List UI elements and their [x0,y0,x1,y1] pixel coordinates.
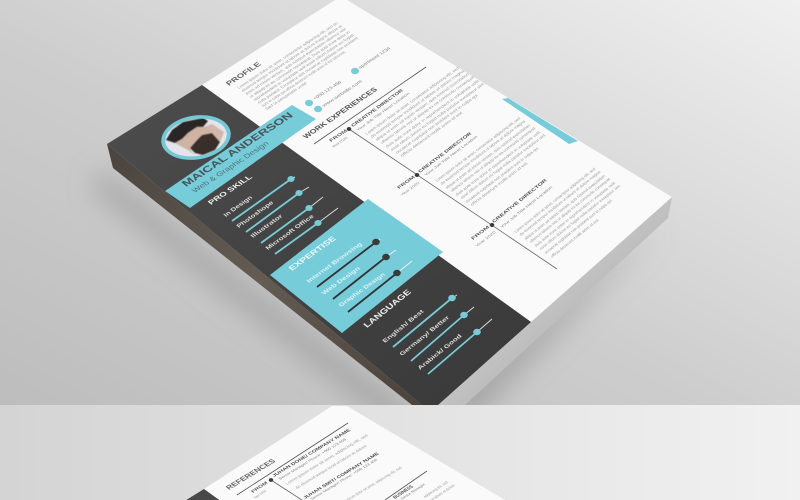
experience 2: CREATIVE DIRECTOR [417,131,474,174]
experience 2: esse cillum dolore eu fugiat nulla pariatur excepteur sint [459,133,547,200]
experience 2: Lorem ipsum dolor sit amet, consectetur adipiscing elit, sed [434,116,522,183]
experience 2: Year 2020 [400,181,421,197]
language labels: Arabick/ Good [416,333,464,371]
contact details: +000-123-456 [312,80,344,101]
panel: expertise [270,199,443,333]
reference 2: JUHAN SMIT/ COMPANY NAME [302,451,381,500]
experience 1: duis aute irure dolor in reprehenderit in voluptate velit [384,79,481,149]
experience 3: FROM [470,225,491,241]
business text [400,480,456,500]
experience 2: Your Job Title Here/ Location [424,135,479,177]
name banner [165,105,316,208]
resume mockup: upper [95,0,672,430]
experience 3: duis aute irure dolor in reprehenderit in voluptate velit [533,180,617,248]
heading: business: BUSINESS [392,484,415,500]
experience 2: ullamco laboris nisi ut aliquip ex ea commodo consequat [449,126,537,193]
heading rule [314,67,426,144]
sheet: second page [204,406,505,500]
job title: Web & Graphic Design [190,140,271,194]
experience 2: aliqua ut enim ad minim veniam, quis nostrud exercitation [444,123,532,190]
heading: language: LANGUAGE [361,287,413,329]
expertise labels: Web Design [320,266,362,296]
business text: adipiscing elit, sed [422,480,449,499]
experience 2: do eiusmod tempor incididunt ut labore et dolore magna [439,119,527,186]
skill labels: Illustrator [249,213,285,239]
experience 1: do eiusmod tempor incididunt ut labore et dolore magna [369,69,466,139]
profile text: eiusmod tempor incididunt ut labore et dolore magna aliqua ut [240,24,344,93]
experience 1: ullamco laboris nisi ut aliquip ex ea commodo consequat [379,75,476,145]
experience 2: FROM [396,175,417,190]
experience 3: esse cillum dolore eu fugiat nulla pariatur excepteur sint [538,183,622,251]
background: lower scene [0,405,800,500]
accent bar [502,98,578,144]
references rule [237,423,348,495]
contact details: apartment 1234 [357,46,393,70]
sidebar: second page [186,489,220,500]
experience 2: duis aute irure dolor in reprehenderit in voluptate velit [454,130,542,197]
language sliders [393,295,492,374]
contact details: www.website.com [321,79,364,108]
experience 3: Lorem ipsum dolor sit amet, consectetur adipiscing elit, sed [513,167,597,234]
contact details [305,46,393,112]
experience 1: CREATIVE DIRECTOR [350,88,405,128]
experience 1: Year 2020 [331,136,349,149]
experience 1: officia deserunt mollit anim id est [399,110,464,158]
experience 3: ullamco laboris nisi ut aliquip ex ea commodo consequat [528,176,612,244]
heading: references: REFERENCES [224,457,277,491]
experience 1: FROM [328,129,349,143]
experience 2 [396,116,547,207]
paper stack: left edge [107,144,422,405]
name: MAICAL ANDERSON [180,111,296,189]
reference 1: FROM [250,481,270,494]
skill labels: In Design [222,195,254,218]
heading: profile: PROFILE [224,60,263,87]
language labels: Germany/ Better [398,314,452,357]
experience 1 [328,66,486,158]
sheet: white page [202,0,672,322]
skill labels: Microsoft Office [264,213,316,251]
expertise labels [305,241,387,308]
reference 1: Lorem ipsum dolor sit amet, adipiscing elit, sed [284,433,369,486]
language labels: English/ Best [381,309,426,344]
experience 2: occaecat cupidatat non proident sunt in culpa qui [464,146,539,204]
experience 1: occaecat cupidatat non proident sunt in culpa qui [394,93,479,155]
experience 3: occaecat cupidatat non proident sunt in culpa qui [543,199,613,255]
timeline [347,127,557,269]
experience 3: officia deserunt mollit anim id est [549,218,600,259]
portrait photo [161,115,231,160]
profile text: reprehenderit in voluptate velit esse cillum dolore eu fugiat [252,33,356,102]
profile text: sunt in culpa qui officia deserunt mollit anim id est laborum. [260,50,347,108]
skill sliders [232,176,338,254]
reference 1: JUHAN DONE/ COMPANY NAME [271,428,352,478]
experience 3 [470,167,622,259]
experience 1: aliqua ut enim ad minim veniam, quis nostrud exercitation [374,72,471,142]
expertise sliders [317,239,412,312]
skill labels: Photoshope [235,200,276,229]
experience 3: Year 2020 [475,231,497,248]
experience 1: esse cillum dolore eu fugiat nulla pariatur excepteur sint [389,82,486,152]
expertise labels: Internet Browsing [305,241,364,284]
reference 1: Senior Manager/ Phone: +000 123 456 [278,438,347,481]
reference 1: do eiusmod tempor incid ut labore et dolore [294,444,368,490]
resume mockup: lower [183,406,505,500]
soft shadow [91,170,630,405]
experience 3: aliqua ut enim ad minim veniam, quis nostrud exercitation [523,174,607,241]
reference 2 [302,451,403,500]
expertise labels: Graphic Design [337,272,387,308]
language labels [381,309,464,371]
heading: pro skill: PRO SKILL [206,173,255,206]
references timeline [269,478,305,500]
profile text: Sed ut perspiciatis unde [264,81,308,111]
profile text: ut aliquip ex ea commodo consequat. Duis aute irure dolor in [248,30,352,99]
experience 1: Lorem ipsum dolor sit amet, consectetur adipiscing elit, sed [364,66,461,136]
heading: work experiences: WORK EXPERIENCES [301,86,379,140]
reference 2: Senior Manager/ Phone: +000 123 456 [310,458,379,500]
reference 1 [250,428,369,500]
sidebar: dark panel [107,85,531,405]
profile text [236,21,360,111]
business rule [385,471,427,500]
profile text: Lorem ipsum dolor sit amet, consectetur adipiscing elit, sed do [236,21,340,90]
experience 3: Your Job Title Here/ Location [500,186,554,229]
skill labels [222,195,316,251]
experience 1: Your Job Title Here/ Location [356,92,411,132]
profile text: nulla pariatur. Excepteur sint occaecat cupidatat non proident [256,36,360,105]
experience 3: CREATIVE DIRECTOR [491,178,549,224]
heading: expertise: EXPERTISE [287,234,339,272]
profile text: enim ad minim veniam, quis nostrud exercitation ullamco nisi [244,27,347,96]
experience 3: do eiusmod tempor incididunt ut labore et dolore magna [518,170,602,237]
paper stack: right edge [438,197,672,405]
reference 1: Year 2020 [253,490,267,500]
experience 2: officia deserunt mollit anim id est [469,161,529,207]
